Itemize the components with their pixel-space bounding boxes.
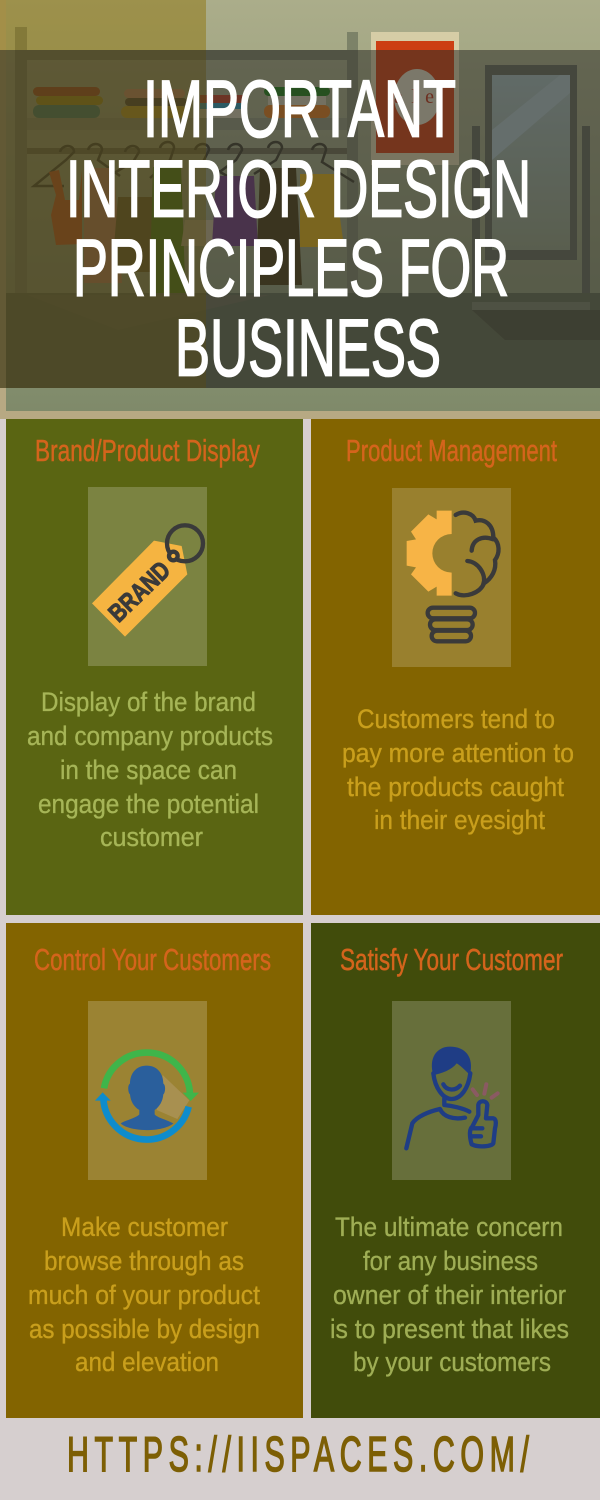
title: IMPORTANT [143,64,456,154]
title [66,64,531,394]
body text: control your customers: Make customer [61,1212,228,1242]
body text: satisfy your customer [330,1212,569,1377]
body text: control your customers: and elevation [75,1347,219,1377]
body text: brand/product display [27,687,273,852]
body text: brand/product display: customer [100,822,203,852]
hero illustration: clothing store [0,0,600,419]
body text: control your customers [28,1212,261,1377]
panel: satisfy your customer [311,923,600,1418]
clothes rack and shelves [15,27,358,295]
body text: product management: in their eyesight [374,805,546,835]
footer url: HTTPS://IISPACES.COM/ [67,1427,529,1482]
icon tile: gear brain bulb [392,488,511,667]
yellow overlay [0,0,206,388]
body text: brand/product display: in the space can [60,755,237,785]
icon tile: brand tag: BRAND [103,556,176,628]
body text: product management: Customers tend to [357,704,555,734]
body text: brand/product display: engage the potential [38,789,259,819]
heading: control your customers: Control Your Customers [34,942,271,977]
body text: satisfy your customer: is to present that likes [330,1314,569,1344]
body text: control your customers: browse through as [44,1246,244,1276]
body text: satisfy your customer: by your customers [353,1347,551,1377]
store floor [6,293,600,388]
panel: brand/product display [6,419,303,915]
folded clothes [33,87,330,118]
hanging clothes [49,167,344,307]
panel: product management [311,419,600,915]
hangers [34,142,354,186]
icon tile: customer cycle [88,1001,207,1180]
body text: satisfy your customer: owner of their interior [333,1280,566,1310]
sale poster [371,32,459,165]
dark title band [0,50,600,388]
heading: brand/product display: Brand/Product Display [35,433,260,468]
body text: product management: the products caught [347,772,565,802]
body text: satisfy your customer: for any business [363,1246,538,1276]
body text: satisfy your customer: The ultimate concern [335,1212,563,1242]
body text: brand/product display: Display of the brand [41,687,256,717]
icon tile: brand tag [88,487,207,666]
title: BUSINESS [175,304,441,394]
body text: control your customers: much of your product [28,1280,261,1310]
body text: control your customers: as possible by design [29,1314,260,1344]
body text: product management [342,704,574,835]
mirror [472,65,590,296]
panel: control your customers [6,923,303,1418]
body text: brand/product display: and company products [27,721,273,751]
icon tile: thumbs up person [392,1001,511,1180]
body text: product management: pay more attention to [342,738,574,768]
sale poster: ale [394,86,434,108]
